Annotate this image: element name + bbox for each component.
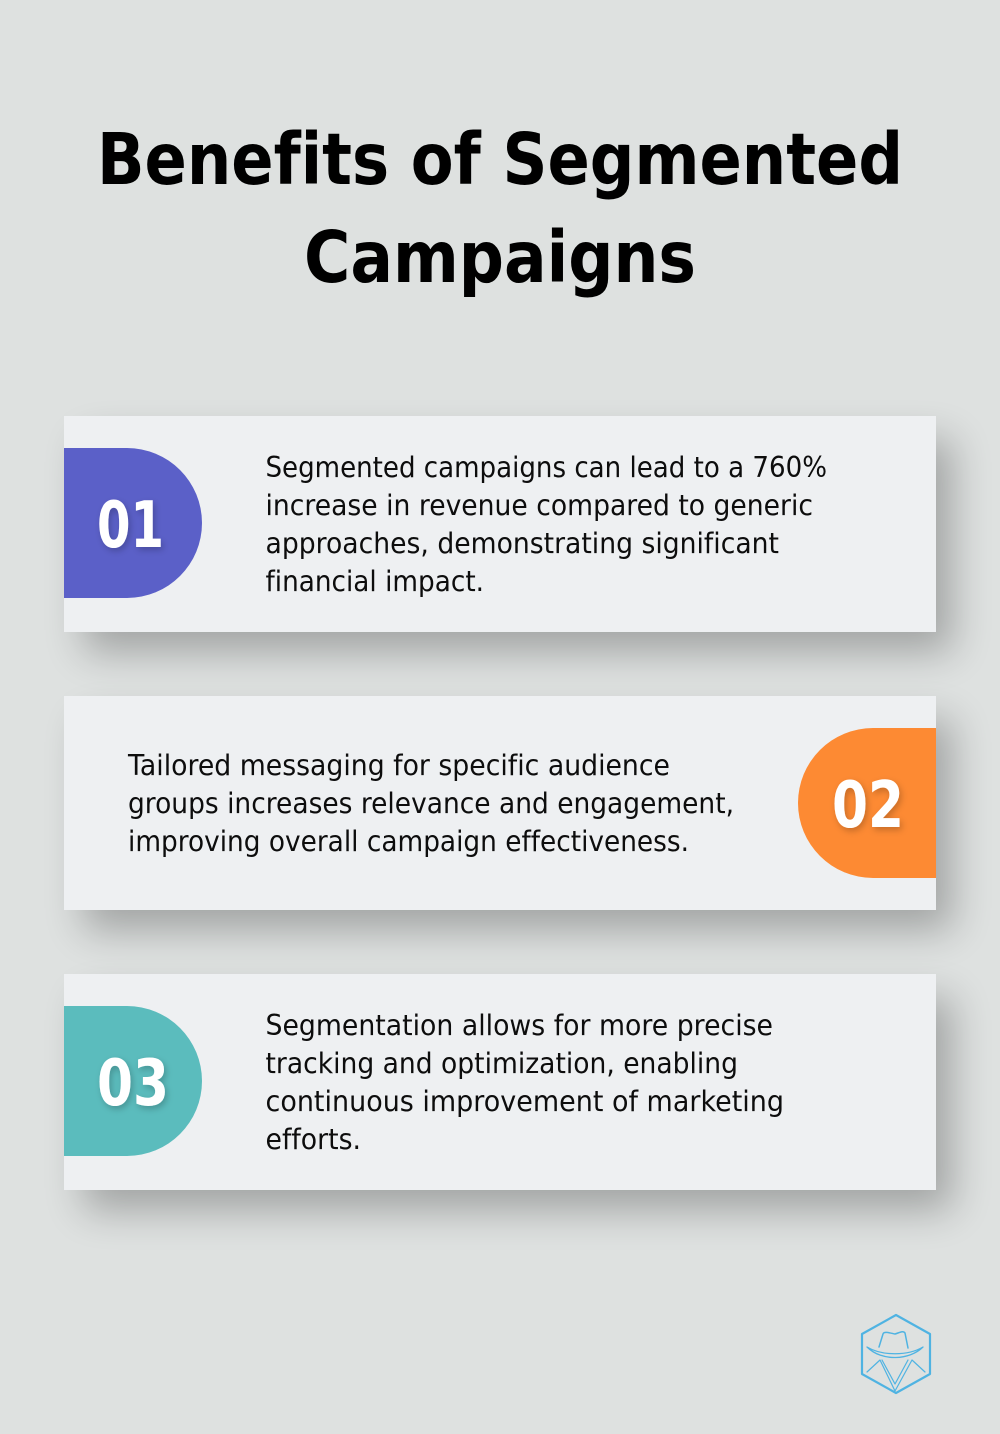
icon: logo hexagon with hat figure xyxy=(862,1315,930,1393)
badge: 02: 02 xyxy=(832,769,904,843)
text: benefit 02 xyxy=(127,749,734,858)
badge: 01: 01 xyxy=(97,489,164,563)
badge: 03 xyxy=(64,1006,202,1156)
text: benefit 03: continuous improvement of marketing xyxy=(266,1085,784,1118)
title: Campaigns xyxy=(304,216,696,299)
badge: 02 xyxy=(798,728,936,878)
panel: benefit 01 xyxy=(64,416,952,652)
title: Benefits of Segmented xyxy=(97,118,903,201)
text: benefit 02: groups increases relevance and engagement, xyxy=(128,787,734,820)
text: benefit 01: approaches, demonstrating significant xyxy=(266,527,779,560)
panel: benefit 02 xyxy=(64,696,952,930)
badge: 01 xyxy=(64,448,202,598)
text: benefit 03 xyxy=(266,1009,784,1156)
text: benefit 01: financial impact. xyxy=(266,565,484,598)
text: benefit 03: tracking and optimization, enabling xyxy=(266,1047,738,1080)
text: benefit 02: improving overall campaign effectiveness. xyxy=(128,825,689,858)
text: benefit 03: Segmentation allows for more precise xyxy=(266,1009,773,1042)
text: benefit 01: increase in revenue compared to generic xyxy=(266,489,813,522)
panel: benefit 03 xyxy=(64,974,952,1210)
title xyxy=(97,118,903,299)
badge: 03: 03 xyxy=(97,1047,169,1121)
text: benefit 01 xyxy=(266,451,827,598)
text: benefit 02: Tailored messaging for specific audience xyxy=(127,749,670,782)
text: benefit 01: Segmented campaigns can lead to a 760% xyxy=(266,451,827,484)
text: benefit 03: efforts. xyxy=(266,1123,361,1156)
